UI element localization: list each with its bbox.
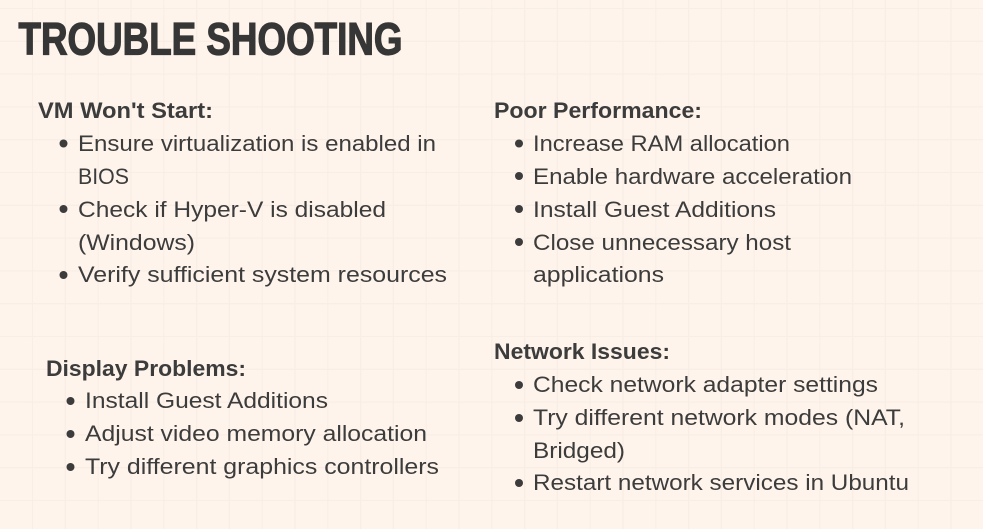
- bullet list: VM Won't Start: Check if Hyper-V is disabled: [78, 197, 386, 222]
- bullet list: VM Won't Start: BIOS: [78, 164, 129, 189]
- bullet list: VM Won't Start: [60, 131, 447, 287]
- bullet list: Poor Performance: Close unnecessary host: [533, 230, 791, 255]
- bullet list: Poor Performance: Increase RAM allocation: [533, 131, 790, 156]
- panel: Network Issues: [494, 339, 909, 495]
- bullet list: Poor Performance: applications: [533, 262, 664, 287]
- bullet list: Poor Performance: Install Guest Additions: [533, 197, 776, 222]
- heading: VM Won't Start: VM Won't Start:: [38, 98, 213, 123]
- bullet list: Display Problems: Try different graphics controllers: [85, 454, 439, 479]
- heading: Display Problems: Display Problems:: [46, 356, 246, 381]
- bullet list: Poor Performance: Enable hardware acceleration: [533, 164, 852, 189]
- bullet list: Display Problems: Adjust video memory allocation: [85, 421, 427, 446]
- bullet list: Poor Performance: [515, 131, 852, 287]
- bullet list: Network Issues: Try different network modes (NAT,: [533, 405, 905, 430]
- bullet list: Network Issues: Bridged): [533, 438, 625, 463]
- bullet list: Network Issues: Check network adapter settings: [533, 372, 878, 397]
- bullet list: VM Won't Start: Verify sufficient system resources: [78, 262, 447, 287]
- bullet list: Display Problems: Install Guest Additions: [85, 388, 328, 413]
- bullet list: Network Issues: Restart network services in Ubuntu: [533, 470, 909, 495]
- heading: Network Issues: Network Issues:: [494, 339, 670, 364]
- bullet list: VM Won't Start: (Windows): [78, 230, 195, 255]
- bullet list: VM Won't Start: Ensure virtualization is enabled in: [78, 131, 436, 156]
- heading: Poor Performance: Poor Performance:: [494, 98, 702, 123]
- panel: Display Problems: [46, 356, 439, 479]
- title: TROUBLE SHOOTING: [18, 14, 402, 64]
- bullet list: Network Issues: [515, 372, 909, 495]
- bullet list: Display Problems: [66, 388, 439, 479]
- panel: Poor Performance: [494, 98, 852, 287]
- panel: VM Won't Start: [38, 98, 447, 287]
